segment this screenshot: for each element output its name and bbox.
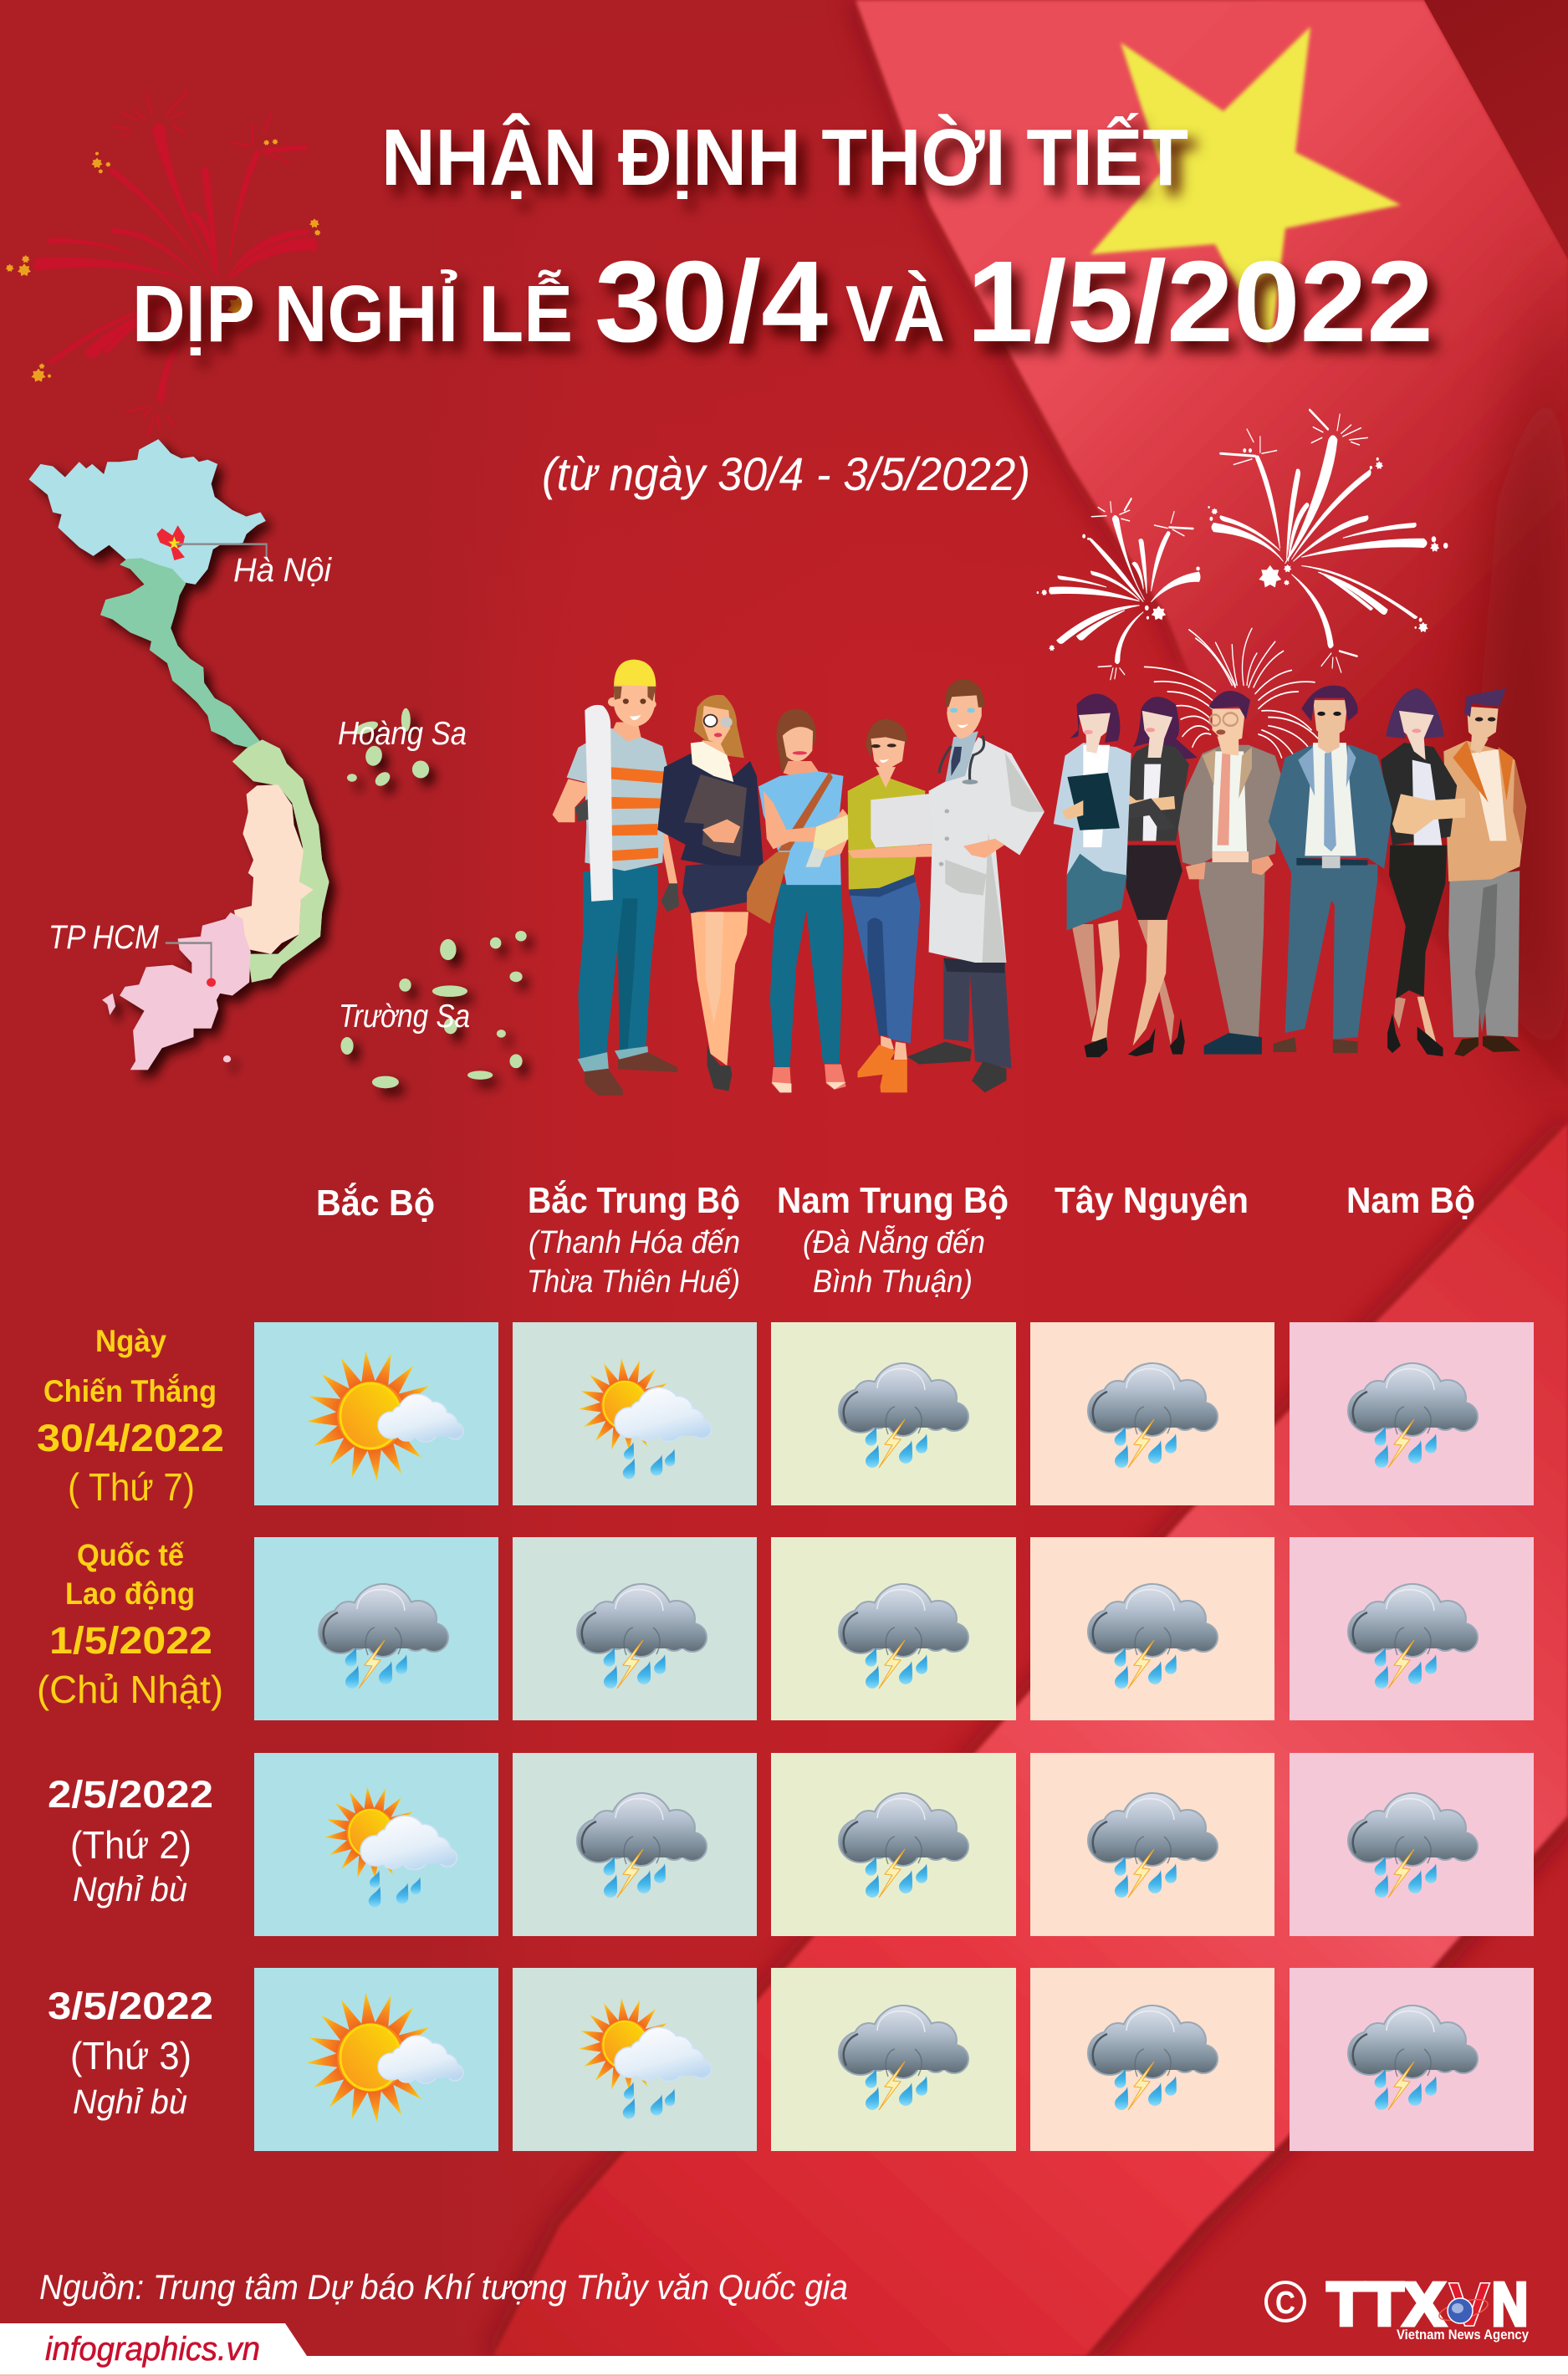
background: flag ribbon upper right [856,0,1568,1129]
fireworks: white, top right [1037,410,1448,758]
small firework [1037,498,1200,680]
region: Bắc Bộ [29,439,266,585]
row label: 30/4: Chiến Thắng [43,1373,217,1408]
cell: row 3 Bắc Trung Bộ, storm [513,1753,757,1936]
header: Nam Trung Bộ: Nam Trung Bộ [777,1180,1009,1221]
title line 2: 1/5/2022: 1/5/2022 [967,238,1433,366]
row label: 1/5: (Chủ Nhật) [37,1668,223,1711]
header: Bắc Trung Bộ: Bắc Trung Bộ [528,1179,740,1221]
person: student with satchel [747,708,850,1092]
cell: row 4 Bắc Bộ, sun and cloud [254,1968,498,2151]
island: Phú Quốc [102,994,115,1015]
row labels [37,1324,224,2121]
row label: 1/5: 1/5/2022 [49,1619,212,1662]
logo: TTXVN: N [1492,2271,1528,2338]
row label: 2/5: 2/5/2022 [48,1773,213,1816]
row label: 3/5 [48,1985,213,2121]
logo: TTXVN [1327,2270,1529,2343]
row label: 30/4: ( Thứ 7) [68,1465,195,1509]
cell: row 3 Tây Nguyên, storm [1030,1753,1274,1936]
logo: TTXVN: TTX [1327,2271,1445,2338]
person: man with glasses [1176,691,1282,1055]
big firework [1208,410,1448,672]
header: Bắc Trung Bộ: (Thanh Hóa đến [529,1225,740,1260]
burst firework behind the group [1145,628,1318,758]
person: woman in dark jacket [1095,697,1198,1056]
person: man in tan jacket [1443,688,1526,1056]
region: Nam Bộ [120,912,251,1070]
people group: office staff [1054,686,1526,1057]
row label: 30/4: 30/4/2022 [37,1417,224,1459]
person: man in blue suit [1269,686,1392,1053]
header: Bắc Trung Bộ [527,1179,740,1300]
cell: row 2 Bắc Trung Bộ, storm [513,1537,757,1720]
header: Bắc Trung Bộ: Thừa Thiên Huế) [527,1265,740,1300]
cell: row 1 Bắc Bộ, sun and cloud [254,1322,498,1505]
logo: TTXVN: Vietnam News Agency [1397,2327,1529,2343]
map label: TP HCM: TP HCM [49,919,160,956]
footer strip [0,2323,1568,2376]
fireworks: red, upper left [6,90,321,435]
logo: TTXVN: V [1448,2270,1490,2339]
copyright mark [1266,2282,1305,2321]
header: Nam Trung Bộ: (Đà Nẵng đến [803,1224,985,1260]
title line 1: NHẬN ĐỊNH THỜI TIẾT [381,112,1188,202]
cell: row 2 Nam Trung Bộ, storm [771,1537,1016,1720]
marker: Hà Nội [156,525,267,560]
row label: 3/5: 3/5/2022 [48,1985,213,2027]
map label: Trường Sa: Trường Sa [339,999,470,1035]
row label: 3/5: (Thứ 3) [70,2034,192,2077]
cell: row 3 Nam Bộ, storm [1290,1753,1534,1936]
cell: row 2 Nam Bộ, storm [1290,1537,1534,1720]
title [132,112,1433,366]
header: Nam Trung Bộ [777,1180,1009,1300]
decorative star of the flag [1090,27,1401,350]
islands: Hoàng Sa [347,708,429,789]
row label: 1/5: Quốc tế [77,1538,184,1572]
row label: 2/5: Nghỉ bù [73,1870,187,1908]
column headers [316,1179,1475,1300]
person: office woman with folder [657,695,764,1091]
cell: row 1 Tây Nguyên, storm [1030,1322,1274,1505]
person: woman with tablet [1054,693,1131,1057]
map of Vietnam [29,439,527,1088]
weather table [254,1322,1534,2151]
person: woman in green shirt [848,718,942,1092]
map label: Hoàng Sa: Hoàng Sa [338,716,467,752]
header: Nam Bộ: Nam Bộ [1346,1180,1475,1221]
region: Tây Nguyên [234,784,314,954]
subtitle: (từ ngày 30/4 - 3/5/2022) [542,447,1030,500]
website label: infographics.vn [45,2331,260,2368]
cell: row 1 Nam Bộ, storm [1290,1322,1534,1505]
row label: 1/5: Lao động [65,1576,195,1611]
person: construction worker [553,660,679,1096]
row label: 2/5 [48,1773,213,1908]
map label: Hà Nội: Hà Nội [233,552,332,589]
cell: row 4 Nam Trung Bộ, storm [771,1968,1016,2151]
row label: 1/5 [37,1538,223,1711]
cell: row 4 Tây Nguyên, storm [1030,1968,1274,2151]
row label: 2/5: (Thứ 2) [70,1823,192,1867]
header: Tây Nguyên: Tây Nguyên [1055,1180,1249,1221]
source line: Nguồn: Trung tâm Dự báo Khí tượng Thủy văn Quốc gia [39,2267,848,2307]
islands: Trường Sa [340,931,527,1088]
title line 2: và: VÀ [845,269,945,359]
cell: row 3 Bắc Bộ, sun cloud rain [254,1753,498,1936]
row label: 3/5: Nghỉ bù [73,2082,187,2121]
cell: row 2 Tây Nguyên, storm [1030,1537,1274,1720]
cell: row 3 Nam Trung Bộ, storm [771,1753,1016,1936]
cell: row 4 Bắc Trung Bộ, sun cloud rain [513,1968,757,2151]
title line 2: dịp nghỉ lễ: DỊP NGHỈ LỄ [132,268,573,359]
background: lower diagonal ribbon [493,1123,1568,2356]
title line 2: 30/4: 30/4 [595,238,828,366]
region: Nam Trung Bộ [232,739,329,983]
cell: row 1 Bắc Trung Bộ, sun cloud rain [513,1322,757,1505]
map regions [29,439,329,1070]
cell: row 1 Nam Trung Bộ, storm [771,1322,1016,1505]
row label: 30/4: Ngày [95,1324,166,1358]
person: woman in leggings [1381,688,1465,1056]
cell: row 4 Nam Bộ, storm [1290,1968,1534,2151]
copyright mark: C [1275,2286,1295,2321]
header: Bắc Bộ: Bắc Bộ [316,1182,435,1224]
header: Nam Trung Bộ: Bình Thuận) [813,1265,973,1300]
people group: workers [553,660,1044,1096]
cell: row 2 Bắc Bộ, storm [254,1537,498,1720]
person: doctor [907,679,1044,1092]
row label: 30/4 [37,1324,224,1509]
region: Bắc Trung Bộ [100,558,260,749]
marker: TP HCM [166,943,216,987]
